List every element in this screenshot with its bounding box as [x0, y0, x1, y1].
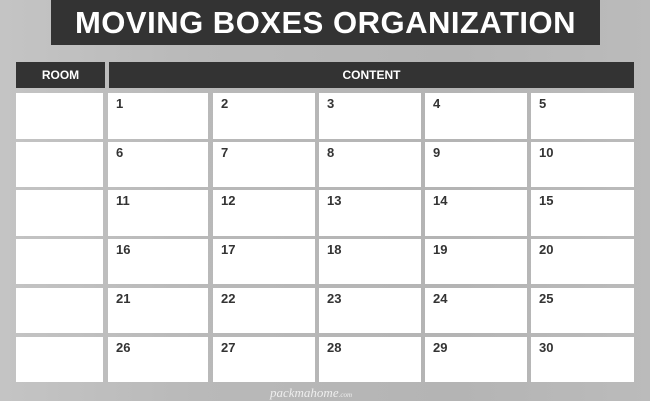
table grid: 18 — [327, 242, 341, 257]
table grid: 24 — [433, 291, 447, 306]
table grid: 21 — [116, 291, 130, 306]
header: content: CONTENT — [342, 68, 400, 82]
header: room — [16, 62, 105, 88]
table grid: 19 — [433, 242, 447, 257]
table grid: 1 — [116, 96, 123, 111]
header: content — [109, 62, 634, 88]
table grid: 8 — [327, 145, 334, 160]
table grid: 2 — [221, 96, 228, 111]
title: MOVING BOXES ORGANIZATION — [75, 4, 576, 40]
table grid: 16 — [116, 242, 130, 257]
table grid: 10 — [539, 145, 553, 160]
table grid: 13 — [327, 193, 341, 208]
table grid: 7 — [221, 145, 228, 160]
table grid: 17 — [221, 242, 235, 257]
table grid: 12 — [221, 193, 235, 208]
table grid: 5 — [539, 96, 546, 111]
table grid: 28 — [327, 340, 341, 355]
table grid: 30 — [539, 340, 553, 355]
table grid: 26 — [116, 340, 130, 355]
table grid: 4 — [433, 96, 440, 111]
table grid: 15 — [539, 193, 553, 208]
header: room: ROOM — [42, 68, 79, 82]
table grid: 25 — [539, 291, 553, 306]
table grid: 6 — [116, 145, 123, 160]
table grid: 22 — [221, 291, 235, 306]
table grid: 11 — [116, 193, 130, 208]
table grid: 14 — [433, 193, 447, 208]
table grid: 20 — [539, 242, 553, 257]
watermark: packmahome.com — [270, 385, 352, 400]
table grid: 3 — [327, 96, 334, 111]
table grid: 9 — [433, 145, 440, 160]
table grid: 23 — [327, 291, 341, 306]
table grid: 29 — [433, 340, 447, 355]
table grid: 27 — [221, 340, 235, 355]
